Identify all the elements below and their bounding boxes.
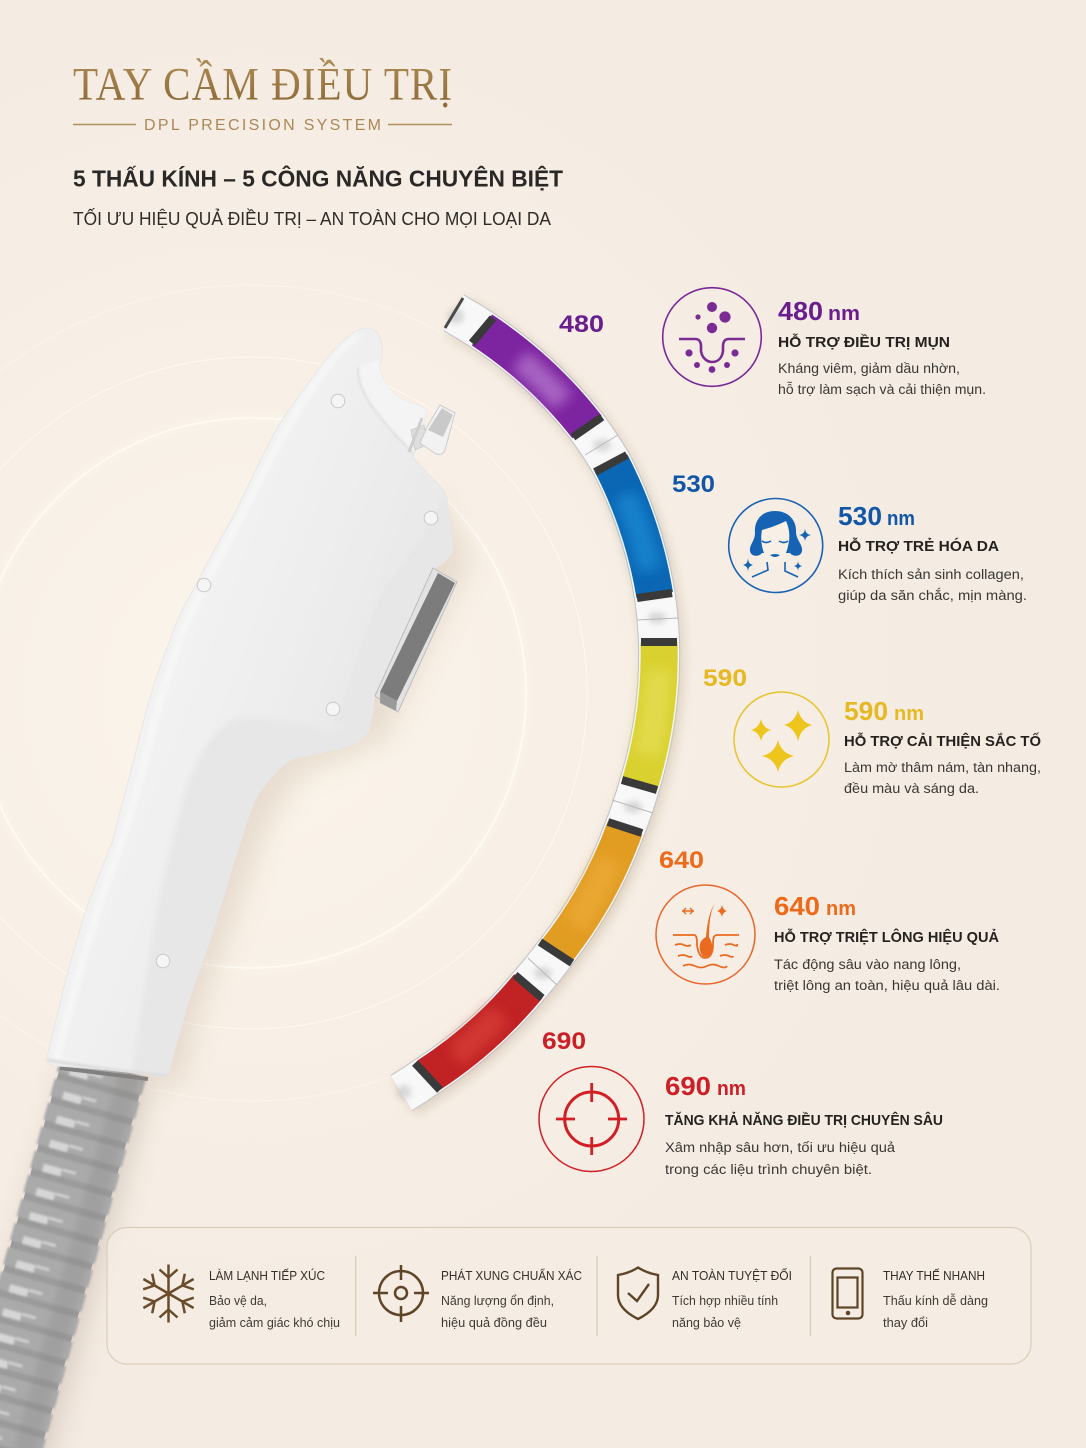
text: AN TOÀN TUYỆT ĐỐI bbox=[672, 1268, 792, 1283]
feature: cooling bbox=[139, 1264, 340, 1330]
value: 690 bbox=[665, 1071, 711, 1101]
description bbox=[838, 567, 1027, 603]
icon: snowflake bbox=[139, 1264, 198, 1322]
heading: TĂNG KHẢ NĂNG ĐIỀU TRỊ CHUYÊN SÂU bbox=[665, 1111, 943, 1129]
icon: acne bbox=[663, 288, 761, 386]
panel: 480 nm bbox=[663, 288, 986, 397]
heading: HỖ TRỢ TRẺ HÓA DA bbox=[838, 537, 999, 555]
filter 640 orange bbox=[556, 828, 625, 952]
filter 530 blue bbox=[611, 463, 655, 595]
text: năng bảo vệ bbox=[672, 1316, 741, 1330]
filter 590 yellow bbox=[640, 642, 659, 785]
description bbox=[665, 1140, 896, 1177]
arc shadow bbox=[404, 317, 662, 1097]
wavelength label 690: 690 bbox=[542, 1028, 586, 1055]
description: Kháng viêm, giảm dầu nhờn, bbox=[778, 361, 960, 376]
value: nm bbox=[717, 1078, 746, 1100]
filter 690 red bbox=[428, 986, 528, 1076]
feature: safety bbox=[618, 1268, 792, 1330]
wavelength label 640: 640 bbox=[659, 847, 704, 874]
panel: 690 nm bbox=[539, 1066, 943, 1177]
icon: device bbox=[832, 1268, 862, 1318]
description: Làm mờ thâm nám, tàn nhang, bbox=[844, 760, 1041, 775]
handle body bbox=[47, 328, 453, 1077]
text: PHÁT XUNG CHUẨN XÁC bbox=[441, 1268, 582, 1283]
value: nm bbox=[828, 303, 860, 325]
value bbox=[665, 1071, 746, 1101]
description: giúp da săn chắc, mịn màng. bbox=[838, 588, 1027, 603]
icon: crosshair bbox=[373, 1265, 429, 1322]
icon: sparkles bbox=[734, 692, 829, 787]
heading: 5 THẤU KÍNH – 5 CÔNG NĂNG CHUYÊN BIỆT bbox=[73, 164, 563, 192]
title: TAY CẦM ĐIỀU TRỊ bbox=[73, 57, 452, 110]
glowing rings bbox=[0, 285, 659, 1101]
wavelength label 480: 480 bbox=[559, 311, 604, 338]
feature: quick swap bbox=[832, 1268, 988, 1330]
text: Năng lượng ổn định, bbox=[441, 1294, 554, 1308]
arc frame bbox=[402, 313, 659, 1093]
description: triệt lông an toàn, hiệu quả lâu dài. bbox=[774, 978, 1000, 993]
description: hỗ trợ làm sạch và cải thiện mụn. bbox=[778, 382, 986, 397]
icon: face bbox=[729, 498, 823, 592]
description: Tác động sâu vào nang lông, bbox=[774, 957, 961, 972]
panel: 530 nm bbox=[729, 498, 1027, 603]
value: 530 bbox=[838, 501, 882, 531]
text: Bảo vệ da, bbox=[209, 1294, 267, 1308]
value: 640 bbox=[774, 891, 820, 921]
description: Xâm nhập sâu hơn, tối ưu hiệu quả bbox=[665, 1140, 896, 1155]
value: nm bbox=[894, 703, 924, 725]
handle shading bbox=[47, 334, 460, 1085]
description bbox=[844, 760, 1041, 796]
value bbox=[838, 501, 915, 531]
panel: 640 nm bbox=[656, 885, 1000, 993]
panel: 590 nm bbox=[734, 692, 1041, 796]
text bbox=[883, 1268, 988, 1330]
knob bbox=[409, 405, 455, 454]
handle lens bbox=[375, 568, 457, 712]
text bbox=[209, 1268, 340, 1330]
value bbox=[778, 296, 860, 326]
text: Thấu kính dễ dàng bbox=[883, 1293, 988, 1308]
value bbox=[844, 696, 924, 726]
subheading: TỐI ƯU HIỆU QUẢ ĐIỀU TRỊ – AN TOÀN CHO MỌI LOẠI DA bbox=[73, 208, 551, 229]
icon: target bbox=[539, 1066, 644, 1172]
heading: HỖ TRỢ TRIỆT LÔNG HIỆU QUẢ bbox=[774, 928, 999, 946]
value: nm bbox=[826, 898, 856, 920]
feature: precise pulse bbox=[373, 1265, 582, 1330]
handle bbox=[47, 328, 470, 1085]
joiner seams bbox=[528, 435, 678, 985]
value: 590 bbox=[844, 696, 888, 726]
joiner shading bbox=[397, 308, 666, 1099]
icon: hair follicle bbox=[656, 885, 755, 984]
screws bbox=[156, 394, 438, 968]
value bbox=[774, 891, 856, 921]
text bbox=[441, 1268, 582, 1330]
wavelength label 530: 530 bbox=[672, 471, 715, 498]
icon: shield bbox=[618, 1268, 658, 1319]
text: thay đổi bbox=[883, 1316, 928, 1330]
dark caps bbox=[415, 318, 677, 1090]
lens arc bbox=[397, 298, 678, 1099]
hose bbox=[0, 1066, 148, 1448]
text: giảm cảm giác khó chịu bbox=[209, 1316, 340, 1330]
description bbox=[778, 361, 986, 397]
description: Kích thích sản sinh collagen, bbox=[838, 567, 1024, 582]
description bbox=[774, 957, 1000, 993]
handle shadow bbox=[120, 490, 470, 1085]
description: trong các liệu trình chuyên biệt. bbox=[665, 1162, 872, 1177]
text: LÀM LẠNH TIẾP XÚC bbox=[209, 1268, 325, 1283]
value: nm bbox=[887, 508, 915, 530]
text: hiệu quả đồng đều bbox=[441, 1316, 547, 1330]
text: Tích hợp nhiều tính bbox=[672, 1294, 778, 1308]
heading: HỖ TRỢ ĐIỀU TRỊ MỤN bbox=[778, 333, 950, 351]
end cap dark edge bbox=[445, 298, 463, 328]
text bbox=[672, 1268, 792, 1330]
value: 480 bbox=[778, 296, 823, 326]
text: THAY THẾ NHANH bbox=[883, 1268, 985, 1283]
heading: HỖ TRỢ CẢI THIỆN SẮC TỐ bbox=[844, 732, 1041, 750]
wavelength label 590: 590 bbox=[703, 665, 747, 692]
filter 480 purple bbox=[482, 330, 587, 427]
panel: feature bar bbox=[107, 1228, 1031, 1364]
subtitle with rules: DPL PRECISION SYSTEM bbox=[144, 117, 381, 134]
description: đều màu và sáng da. bbox=[844, 781, 979, 796]
